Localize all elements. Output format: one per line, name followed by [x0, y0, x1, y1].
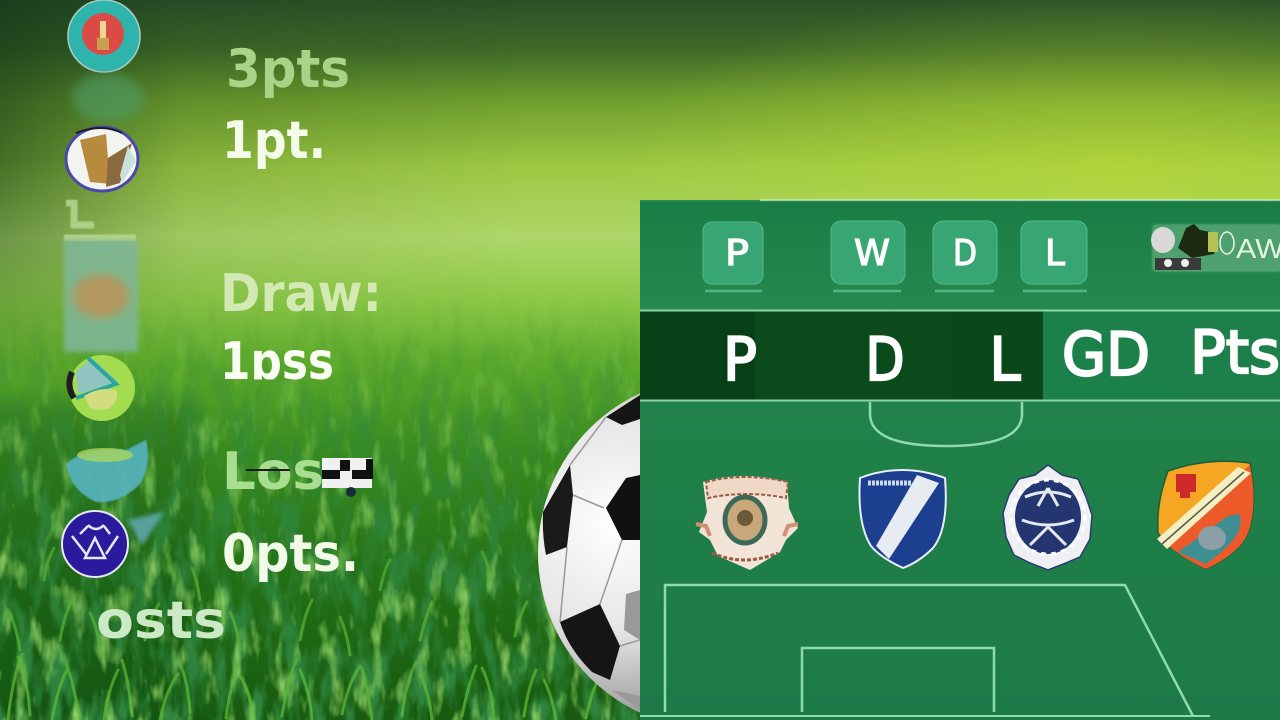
sponsor logo strip: [1151, 224, 1280, 272]
button: L: L: [1045, 233, 1065, 274]
background: grass field: [0, 328, 640, 720]
button: W: [831, 221, 905, 291]
button: W: W: [854, 233, 890, 274]
badge: lime and teal ball: [69, 355, 135, 421]
button: P: [703, 222, 763, 291]
badge: white and blue oval: [66, 127, 138, 191]
header row: GD and Pts cells: Pts: [1190, 318, 1280, 388]
text: Los: Los: [222, 442, 324, 502]
panel top bar: [640, 202, 1280, 310]
blurred badge ghost: [72, 74, 144, 122]
header row: dark cells: D: [866, 325, 904, 395]
text: 3pts: 3pts: [226, 39, 350, 100]
badge: teal and red roundel: [68, 0, 140, 72]
text: osts: osts: [96, 591, 226, 651]
button: D: D: [953, 233, 977, 274]
soccer ball: [538, 393, 640, 713]
pitch markings: [640, 402, 1210, 716]
text: 1pt.: 1pt.: [222, 111, 326, 171]
button: P: P: [725, 233, 749, 274]
header row: dark cells: L: [990, 325, 1021, 395]
badge: navy roundel: [62, 511, 128, 577]
header row: dark cells: [640, 311, 1043, 400]
crest: navy ornamental badge: [1003, 465, 1092, 570]
text: Draw:: Draw:: [220, 264, 382, 324]
header row: GD and Pts cells: GD: [1062, 320, 1150, 390]
crest: heritage shield: [696, 476, 798, 570]
sponsor logo strip: AW: [1236, 233, 1280, 264]
button: D: [933, 221, 997, 291]
table lines: [640, 310, 1280, 400]
button: L: [1021, 221, 1087, 291]
icon: checkered overlay on Los: [246, 458, 373, 497]
blurred table ghost column: [64, 203, 138, 352]
text: 1pss: 1pss: [220, 332, 334, 392]
panel: league table: [640, 200, 1280, 720]
crest: orange diagonal shield: [1157, 461, 1254, 569]
blurred blue badge: [66, 440, 164, 546]
header row: GD and Pts cells: [1043, 311, 1280, 400]
crest: blue shield with white stripe: [859, 470, 946, 568]
text: 0pts.: 0pts.: [222, 524, 359, 584]
header row: dark cells: P: [723, 325, 757, 395]
panel glow edge: [760, 199, 1280, 201]
